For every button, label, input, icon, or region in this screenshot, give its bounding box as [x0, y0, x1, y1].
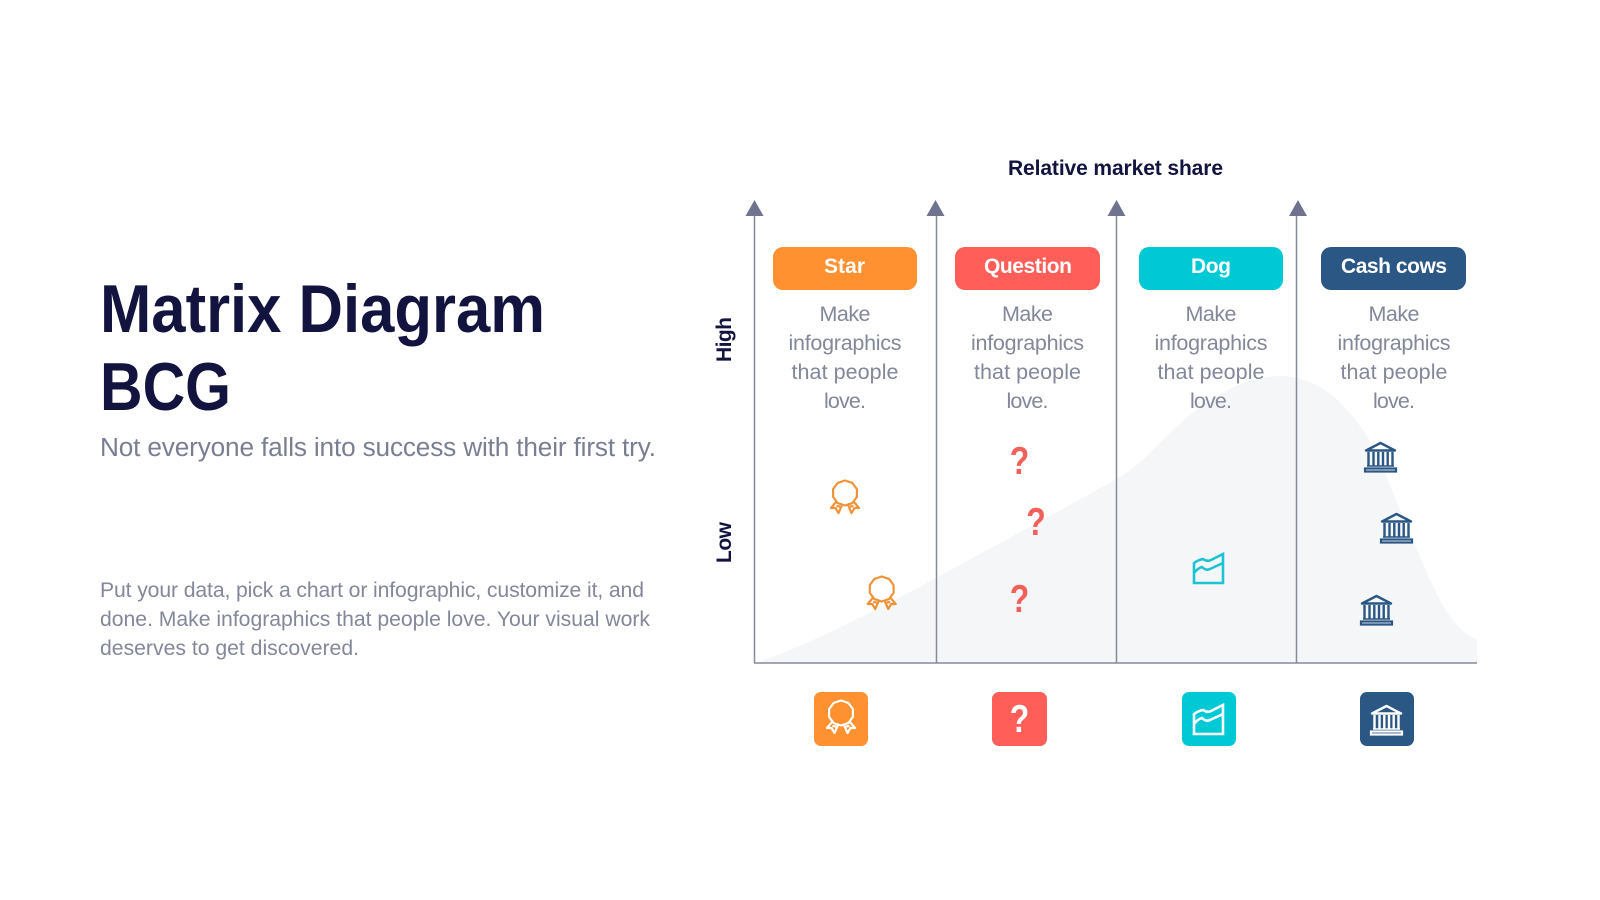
legend tile: dog — [1182, 692, 1236, 746]
legend tile: question: ? — [1010, 698, 1029, 741]
column: question: Question — [984, 255, 1072, 278]
column: question: that people — [974, 360, 1081, 384]
column: cash cows: love. — [1373, 389, 1415, 413]
column: question — [955, 247, 1100, 413]
column: dog: Dog — [1191, 255, 1231, 278]
column: star: that people — [792, 360, 898, 384]
column: cash cows: that people — [1340, 360, 1448, 384]
column: cash cows: infographics — [1338, 331, 1450, 355]
y axis label: high: High — [713, 317, 736, 362]
column: dog: that people — [1158, 360, 1264, 384]
column: dog: love. — [1190, 389, 1232, 413]
subtitle: Not everyone falls into success with their first try. — [100, 432, 656, 462]
column: question: Make — [1002, 302, 1053, 326]
column: star — [773, 247, 917, 413]
legend tile: question — [992, 692, 1047, 746]
icon: dog chart — [1194, 554, 1223, 583]
paragraph: done. Make infographics that people love. Your visual work — [100, 608, 650, 631]
column: star: Star — [824, 255, 865, 278]
column: question: infographics — [971, 331, 1084, 355]
column: star: Make — [820, 302, 870, 326]
area curve background — [757, 376, 1477, 663]
column: star: love. — [824, 389, 866, 413]
icon: star rosette upper — [831, 480, 859, 513]
paragraph: Put your data, pick a chart or infographic, customize it, and — [100, 579, 644, 602]
icon: question mark upper: ? — [1010, 440, 1029, 483]
icon: bank middle — [1381, 514, 1412, 542]
icon: question mark lower: ? — [1010, 578, 1029, 621]
title: Matrix Diagram — [100, 271, 545, 347]
column: dog — [1139, 247, 1283, 413]
title — [100, 271, 545, 425]
icon: star rosette lower — [868, 576, 896, 609]
icon: bank lower — [1361, 596, 1392, 624]
x axis title: Relative market share — [1008, 157, 1223, 180]
legend tile: star — [814, 692, 868, 746]
column: cash cows: Make — [1368, 302, 1420, 326]
paragraph — [100, 579, 650, 660]
matrix axes and arrows — [746, 200, 1477, 663]
column: star: infographics — [788, 331, 902, 355]
paragraph: deserves to get discovered. — [100, 637, 359, 660]
column: dog: infographics — [1154, 331, 1268, 355]
column: cash cows: Cash cows — [1341, 255, 1447, 278]
column: cash cows — [1321, 247, 1466, 413]
icon: question mark middle: ? — [1026, 501, 1046, 544]
column: dog: Make — [1186, 302, 1236, 326]
y axis label: low: Low — [713, 521, 736, 563]
icon: bank upper — [1365, 443, 1396, 472]
title: BCG — [100, 349, 231, 425]
legend tile: cash cows — [1360, 692, 1414, 746]
column: question: love. — [1006, 389, 1048, 413]
